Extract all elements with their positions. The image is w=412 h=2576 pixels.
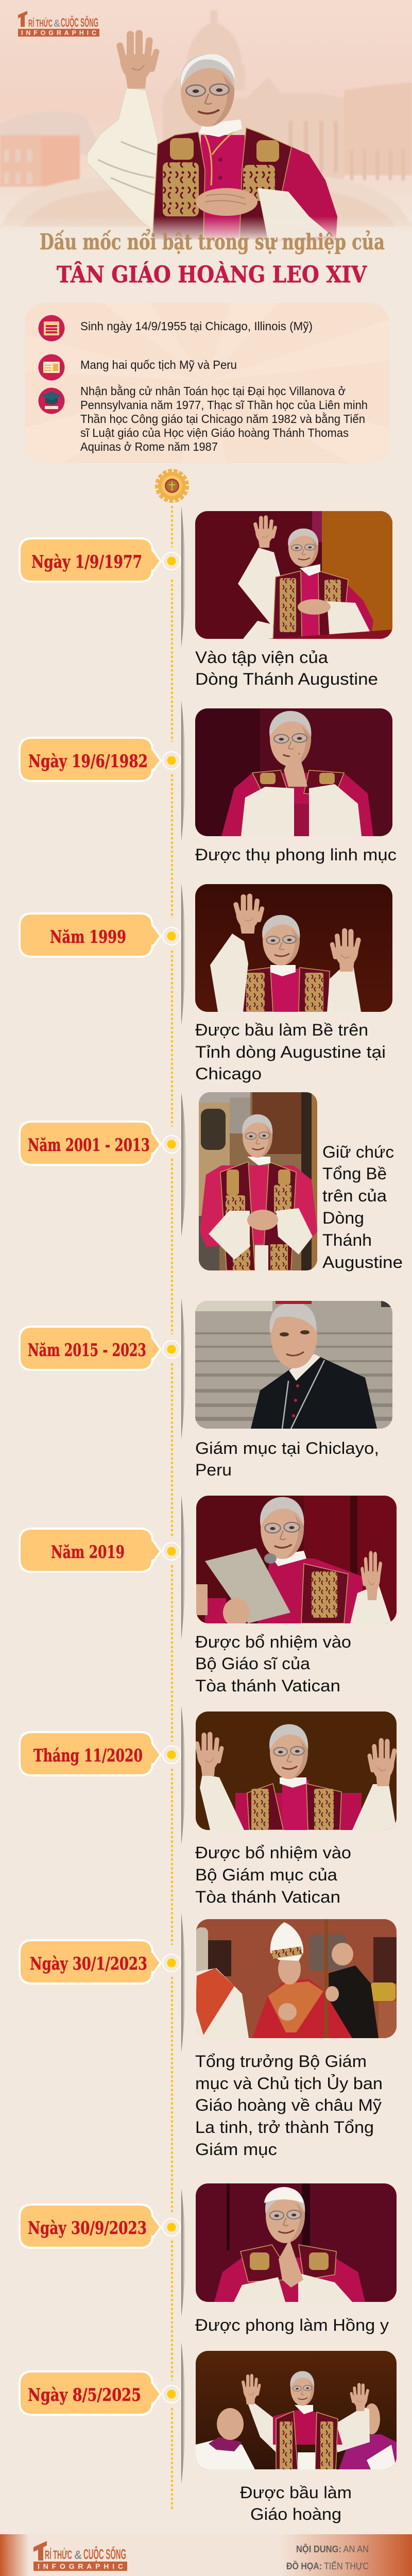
logo: Trí Thức & Cuộc Sống Infographic (18, 11, 99, 37)
logo: Trí Thức & Cuộc Sống Infographic: RÍ THỨC (28, 17, 53, 29)
milestone 6: caption: Bộ Giáo sĩ của (195, 1654, 310, 1673)
milestone 1: caption: Dòng Thánh Augustine (195, 670, 378, 688)
milestone 10: caption: Được bầu làm (240, 2483, 352, 2502)
milestone 6: caption: Được bổ nhiệm vào (195, 1633, 351, 1651)
milestone 3: photo (195, 884, 392, 1012)
milestone 6: photo (196, 1496, 397, 1627)
milestone 7: date bubble (20, 1732, 180, 1775)
milestone 9: date bubble: Ngày 30/9/2023 (28, 2218, 147, 2239)
text: education: Aquinas ở Rome năm 1987 (80, 440, 218, 453)
milestone 2: caption: Được thụ phong linh mục (195, 845, 397, 864)
footer logo: RÍ THỨC (45, 2548, 72, 2562)
hero: Vatican background and Pope portrait (0, 0, 412, 242)
illustration: St Peter's Basilica (0, 10, 412, 227)
milestone 3: caption: Được bầu làm Bề trên (195, 1021, 368, 1039)
text: birth: Sinh ngày 14/9/1955 tại Chicago, Illinois (Mỹ) (80, 319, 313, 333)
text: education: sĩ Luật giáo của Học viện Giáo hoàng Thánh Thomas (80, 426, 349, 439)
milestone 4: caption: Thánh (322, 1231, 372, 1249)
milestone 3: caption: Tỉnh dòng Augustine tại (195, 1043, 386, 1061)
milestone 8: date bubble: Ngày 30/1/2023 (30, 1954, 147, 1974)
text: nationality: Mang hai quốc tịch Mỹ và Peru (80, 358, 237, 371)
milestone 5: caption: Peru (195, 1461, 232, 1479)
milestone 5: date bubble: Năm 2015 - 2023 (28, 1340, 146, 1361)
text: education (80, 384, 368, 453)
milestone 8: caption (195, 2052, 383, 2159)
milestone 4: caption: Augustine (322, 1253, 403, 1272)
milestone 8: caption: mục và Chủ tịch Ủy ban (195, 2074, 383, 2093)
timeline: dotted line and shadows (172, 506, 186, 2510)
icon: graduation cap (38, 387, 65, 414)
credits: NỘI DUNG: AN AN (296, 2544, 369, 2554)
milestone 4: caption: trên của (322, 1187, 387, 1205)
milestone 7: photo (194, 1711, 397, 1830)
milestone 10: caption: Giáo hoàng (250, 2505, 341, 2523)
footer logo: & (74, 2548, 82, 2562)
milestone 9: photo (196, 2183, 397, 2302)
milestone 4: caption: Dòng (322, 1209, 364, 1227)
credits (286, 2544, 369, 2571)
panel: biography facts (25, 303, 389, 463)
heading (40, 228, 385, 288)
footer logo: INFOGRAPHIC (38, 2562, 123, 2570)
milestone 3: caption (195, 1021, 386, 1083)
milestone 10: date bubble: Ngày 8/5/2025 (28, 2385, 141, 2405)
icon: calendar (38, 315, 65, 341)
milestone 8: date bubble (20, 1940, 180, 1984)
milestone 1: date bubble: Ngày 1/9/1977 (31, 552, 142, 572)
logo: Trí Thức & Cuộc Sống Infographic: CUỘC SỐNG (61, 15, 98, 30)
text: education: Thần học Công giáo tại Chicago năm 1982 và bằng Tiến (80, 412, 365, 426)
icon: ID card (38, 354, 65, 380)
milestone 9: date bubble (20, 2205, 180, 2248)
title: TÂN GIÁO HOÀNG LEO XIV (57, 261, 367, 288)
text: education: Pennsylvania năm 1977, Thạc sĩ Thần học của Liên minh (80, 398, 368, 412)
illustration: Pope figure (87, 30, 337, 242)
milestone 5: caption (195, 1439, 379, 1479)
milestone 9: caption: Được phong làm Hồng y (195, 2316, 389, 2334)
milestone 7: caption (195, 1843, 351, 1906)
milestone 4: date bubble (20, 1122, 180, 1165)
milestone 4: date bubble: Năm 2001 - 2013 (28, 1135, 150, 1156)
logo: Trí Thức & Cuộc Sống Infographic: & (54, 18, 60, 29)
credits: ĐỒ HỌA: TIẾN THỰC (286, 2561, 369, 2571)
milestone 4: caption (322, 1143, 403, 1272)
milestone 6: caption: Tòa thánh Vatican (195, 1676, 340, 1695)
milestone 8: caption: La tinh, trở thành Tổng (195, 2118, 374, 2137)
milestone 6: date bubble (20, 1529, 180, 1572)
milestone 10: date bubble (20, 2371, 180, 2415)
milestone 1: caption (195, 648, 378, 688)
milestone 7: caption: Tòa thánh Vatican (195, 1888, 340, 1906)
footer logo (33, 2541, 127, 2571)
milestone 1: photo (195, 511, 392, 639)
milestone 6: date bubble: Năm 2019 (51, 1542, 125, 1563)
milestone 5: date bubble (20, 1327, 180, 1370)
milestone 4: caption: Giữ chức (322, 1143, 394, 1161)
milestone 1: caption: Vào tập viện của (195, 648, 328, 667)
milestone 7: date bubble: Tháng 11/2020 (33, 1745, 143, 1766)
milestone 10: photo (196, 2351, 397, 2469)
milestone 6: caption (195, 1633, 351, 1695)
milestone 10: caption (240, 2483, 352, 2523)
icon: golden emblem (158, 472, 186, 500)
footer (0, 2534, 412, 2576)
milestone 5: photo (195, 1301, 392, 1429)
milestone 7: caption: Bộ Giám mục của (195, 1866, 337, 1884)
logo: Trí Thức & Cuộc Sống Infographic: INFOGRAPHIC (21, 29, 96, 37)
milestone 3: date bubble (20, 913, 180, 957)
milestone 8: caption: Tổng trưởng Bộ Giám (195, 2052, 367, 2071)
milestone 1: date bubble (20, 538, 180, 582)
milestone 4: photo (199, 1092, 317, 1270)
milestone 2: photo (195, 708, 392, 836)
milestone 8: caption: Giám mục (195, 2140, 277, 2159)
milestone 5: caption: Giám mục tại Chiclayo, (195, 1439, 379, 1458)
milestone 7: caption: Được bổ nhiệm vào (195, 1843, 351, 1862)
milestone 8: photo (196, 1919, 397, 2038)
milestone 2: date bubble (20, 738, 180, 781)
footer: CUỘC SỐNG (83, 2546, 126, 2562)
text: education: Nhận bằng cử nhân Toán học tại Đại học Villanova ở (80, 384, 346, 398)
milestone 4: caption: Tổng Bề (322, 1164, 387, 1183)
milestone 2: date bubble: Ngày 19/6/1982 (28, 751, 148, 772)
milestone 8: caption: Giáo hoàng về châu Mỹ (195, 2096, 382, 2114)
milestone 3: caption: Chicago (195, 1064, 262, 1083)
milestone 3: date bubble: Năm 1999 (50, 927, 126, 947)
